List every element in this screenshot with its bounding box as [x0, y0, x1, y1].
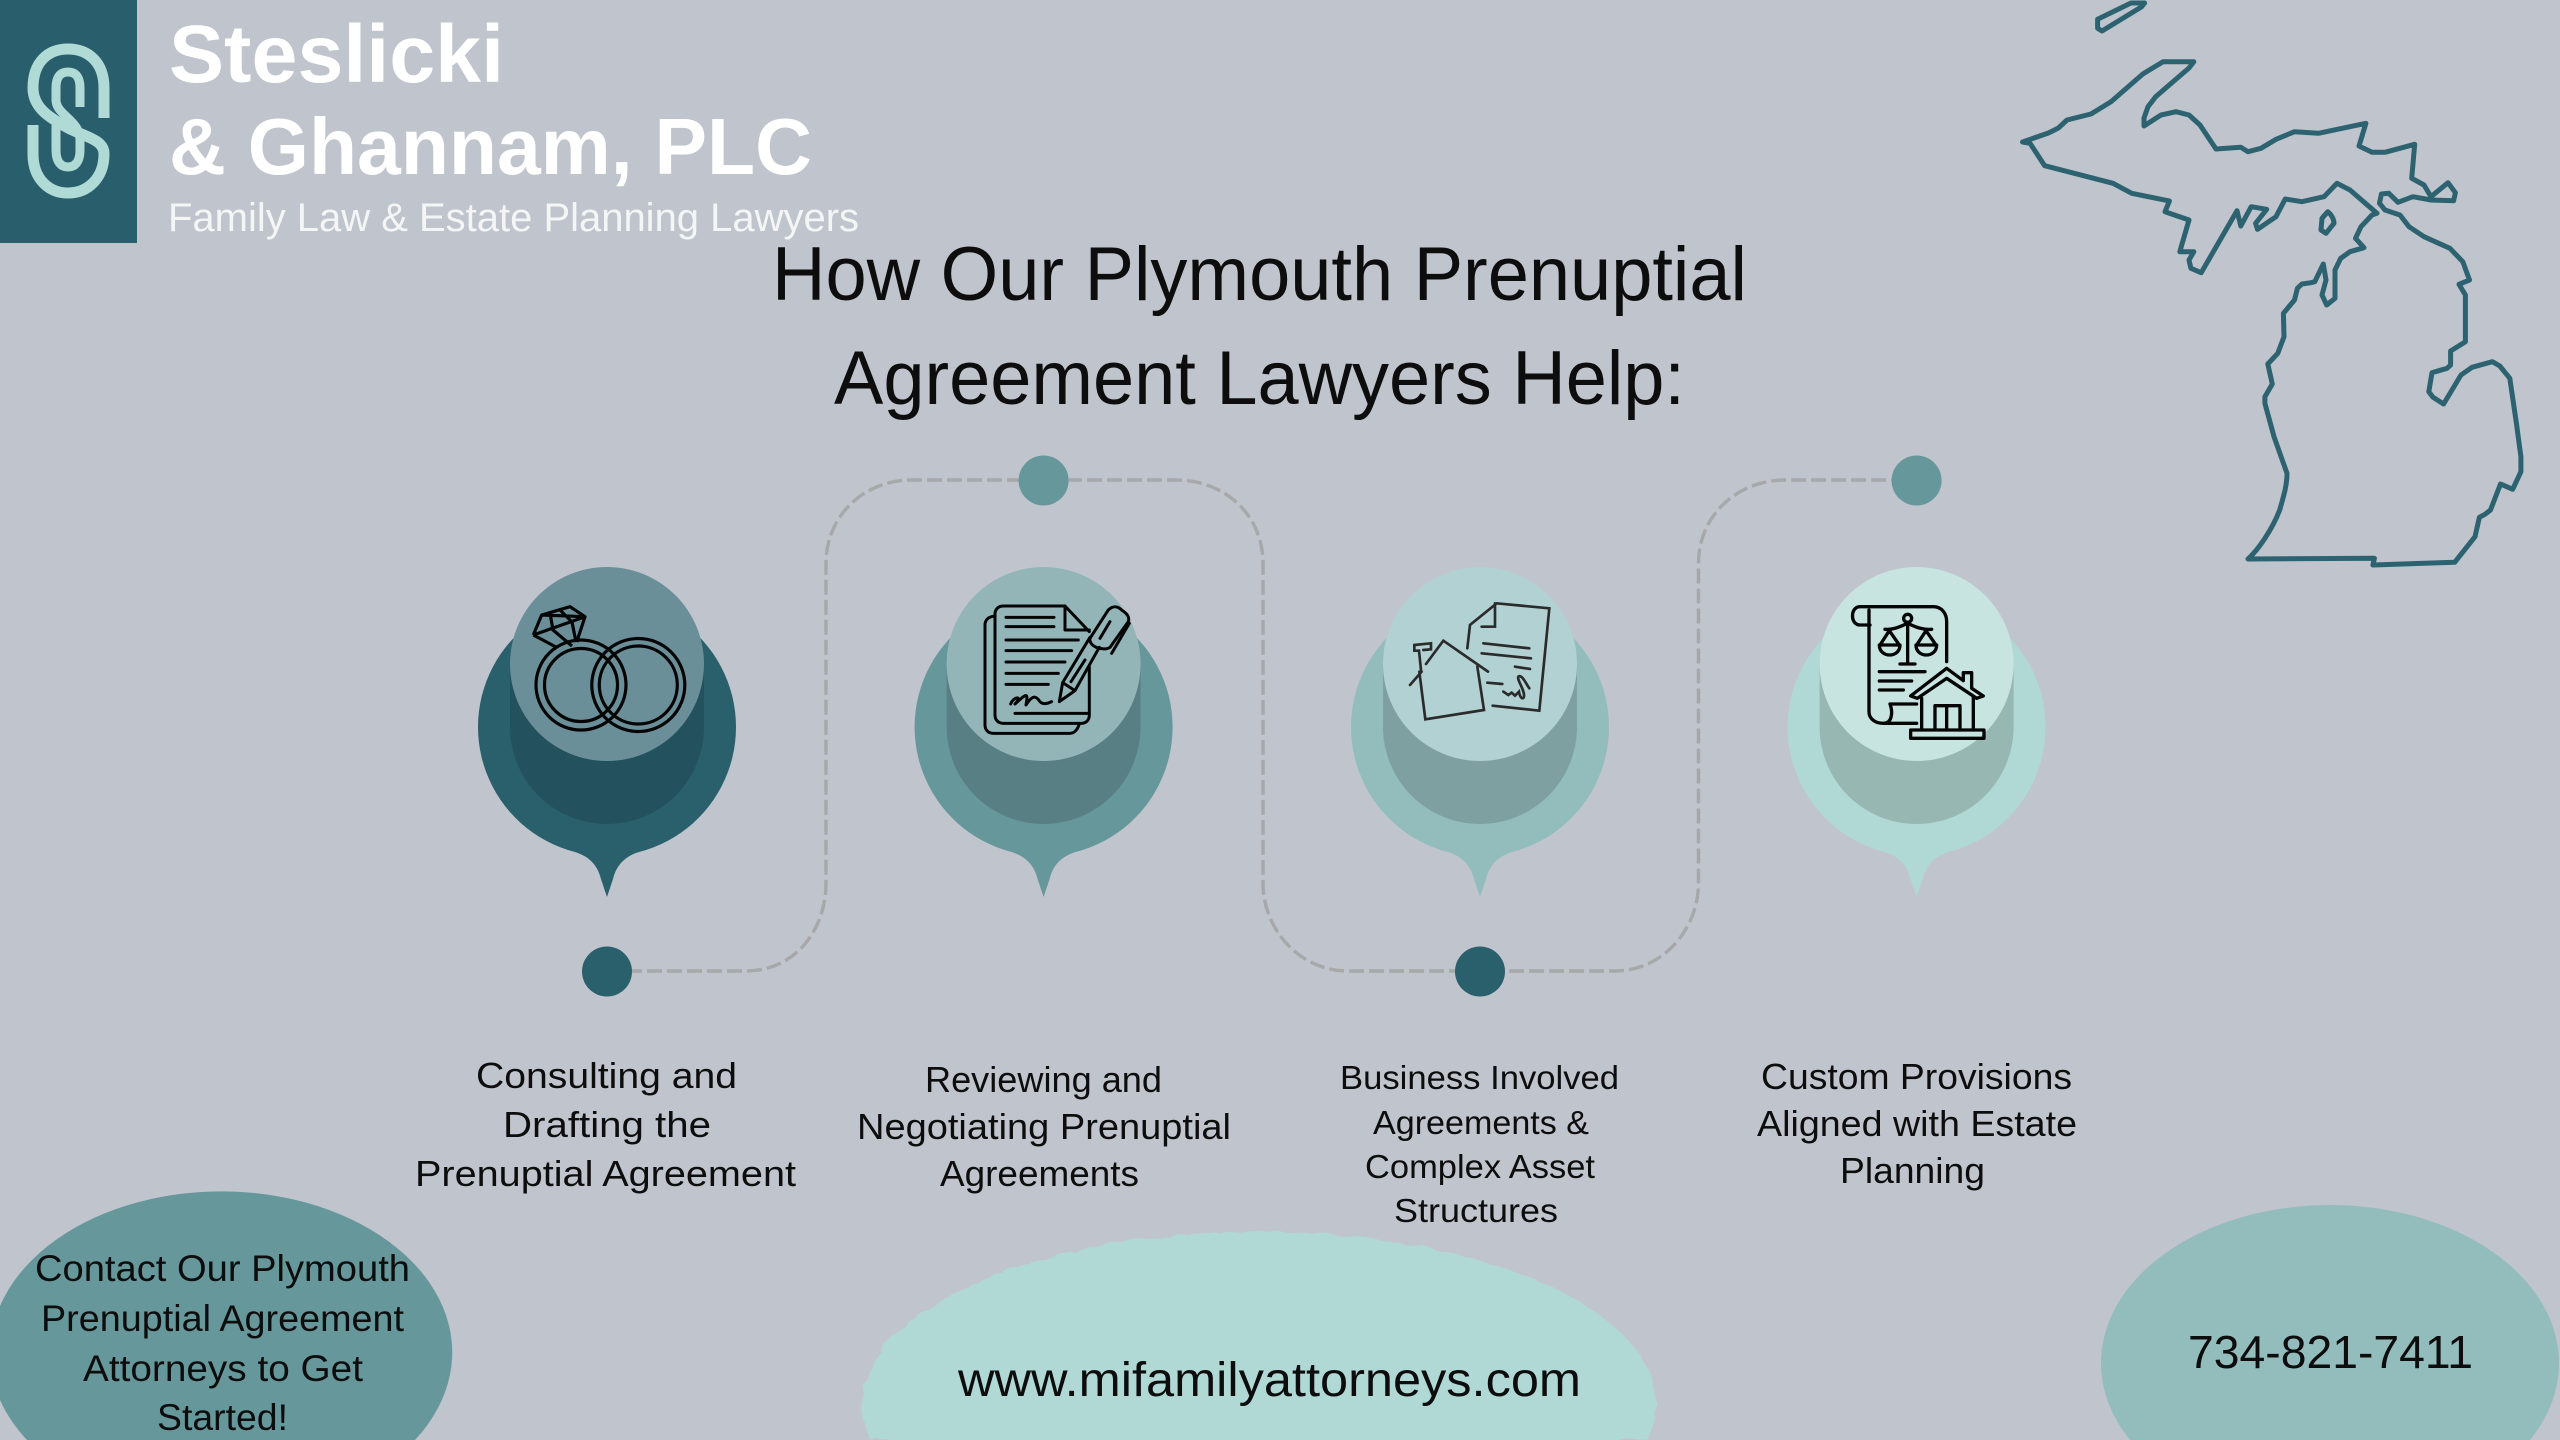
callout: website	[862, 1232, 1656, 1440]
pin 3: business agreements	[1351, 567, 1609, 897]
firm name: Steslicki	[169, 9, 504, 100]
callout: contact: Prenuptial Agreement	[41, 1298, 405, 1339]
map: Michigan outline	[2022, 3, 2521, 565]
step 3 label: Complex Asset	[1365, 1148, 1595, 1185]
step 3 marker dot	[1455, 946, 1505, 996]
logo block	[0, 0, 859, 243]
firm name	[169, 9, 812, 191]
callout: contact: Started!	[157, 1397, 288, 1438]
callout: contact: Attorneys to Get	[83, 1348, 364, 1389]
step 1 label	[415, 1055, 796, 1194]
step 3 label	[1340, 1059, 1619, 1229]
icon: scales scroll and house	[1852, 607, 1984, 738]
firm tagline: Family Law & Estate Planning Lawyers	[168, 196, 859, 240]
title	[772, 232, 1747, 421]
step 4 label: Aligned with Estate	[1757, 1103, 2077, 1144]
step 4 label: Custom Provisions	[1761, 1056, 2072, 1097]
callout: contact	[0, 1191, 452, 1440]
title: Agreement Lawyers Help:	[834, 336, 1685, 421]
pin 4: custom provisions	[1788, 567, 2046, 897]
callout: contact: Contact Our Plymouth	[35, 1248, 410, 1289]
pin 1: consulting and drafting	[478, 567, 736, 897]
step 2 label: Reviewing and	[925, 1059, 1162, 1100]
step 2 marker dot	[1019, 456, 1069, 506]
firm name: & Ghannam, PLC	[169, 102, 812, 191]
step 2 label: Negotiating Prenuptial	[857, 1106, 1231, 1147]
step 4 marker dot	[1892, 456, 1942, 506]
icon: interlocked S monogram	[33, 49, 104, 193]
title: How Our Plymouth Prenuptial	[772, 232, 1747, 317]
step 2 label: Agreements	[940, 1153, 1139, 1194]
step 1 label: Drafting the	[503, 1104, 711, 1145]
icon: wedding rings with diamond	[533, 607, 685, 732]
step 3 label: Business Involved	[1340, 1059, 1619, 1096]
step 4 label	[1757, 1056, 2077, 1191]
callout: website: www.mifamilyattorneys.com	[957, 1354, 1581, 1407]
callout: phone: 734-821-7411	[2188, 1326, 2473, 1378]
step 3 label: Agreements &	[1373, 1104, 1589, 1141]
step 1 marker dot	[582, 946, 632, 996]
step 3 label: Structures	[1394, 1192, 1558, 1229]
step 1 label: Consulting and	[476, 1055, 737, 1096]
pin 2: reviewing and negotiating	[915, 567, 1173, 897]
step 1 label: Prenuptial Agreement	[415, 1153, 796, 1194]
icon: signed document and pen	[985, 606, 1129, 733]
dashed connector path	[607, 480, 1916, 971]
step 2 label	[857, 1059, 1231, 1194]
callout: phone	[2101, 1205, 2559, 1440]
step 4 label: Planning	[1840, 1150, 1985, 1191]
icon: house and signed paper	[1410, 603, 1549, 719]
